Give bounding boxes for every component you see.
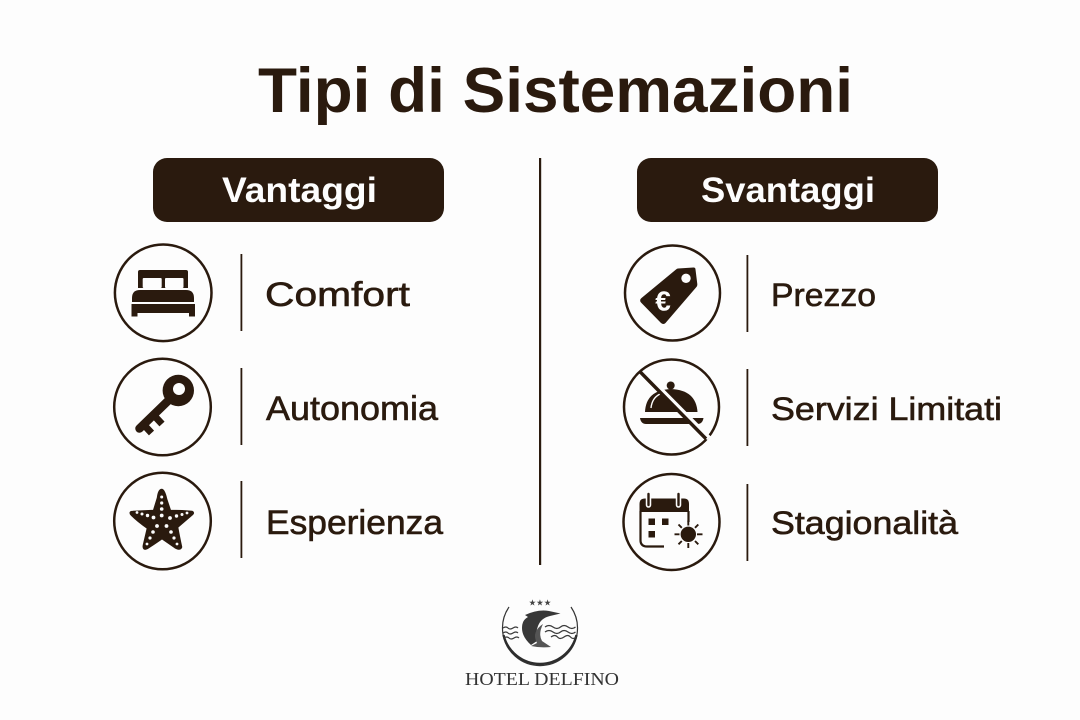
label: servizi limitati: Servizi Limitati — [771, 391, 1002, 427]
panel: svantaggi — [624, 158, 1002, 570]
icon: starfish — [114, 473, 211, 569]
heading: svantaggi: Svantaggi — [701, 171, 875, 210]
logo: hotel delfino: HOTEL DELFINO — [465, 669, 619, 689]
icon: key — [114, 359, 211, 455]
logo: hotel delfino: ★★★ — [529, 598, 552, 608]
title: Tipi di Sistemazioni — [258, 56, 853, 126]
icon: bed — [115, 244, 212, 341]
heading: vantaggi — [153, 158, 444, 222]
panel: vantaggi — [114, 158, 444, 569]
label: esperienza: Esperienza — [266, 504, 443, 542]
heading: svantaggi — [637, 158, 938, 222]
label: stagionalita: Stagionalità — [771, 505, 958, 541]
label: prezzo: Prezzo — [771, 277, 876, 313]
label: autonomia: Autonomia — [266, 390, 438, 428]
logo: hotel delfino — [465, 598, 619, 689]
icon: seasonal calendar — [624, 474, 720, 570]
heading: vantaggi: Vantaggi — [222, 171, 377, 210]
icon: price tag: € — [655, 286, 671, 316]
icon: no room service — [624, 360, 719, 454]
icon: price tag — [625, 246, 720, 340]
label: comfort: Comfort — [265, 276, 411, 314]
